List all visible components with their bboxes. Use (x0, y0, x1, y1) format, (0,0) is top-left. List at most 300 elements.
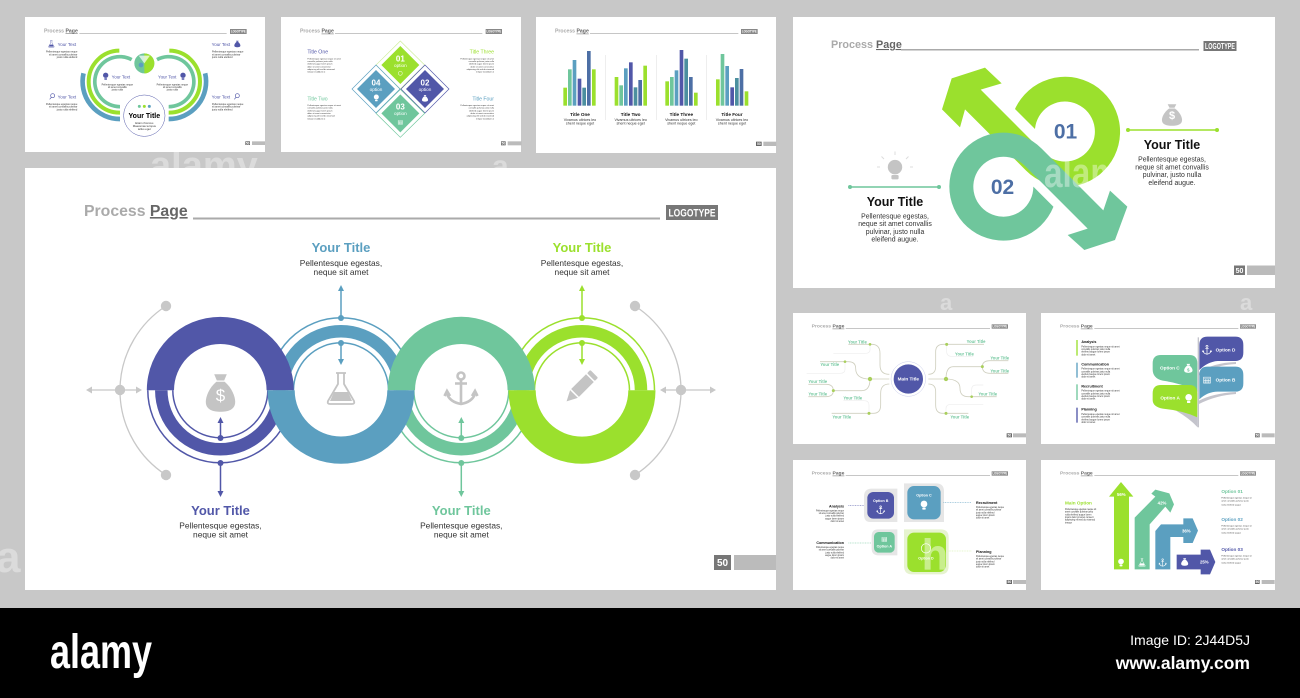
thin arcs: lime (510, 318, 654, 390)
list: analysis (1076, 340, 1120, 356)
text: option 02: amet convallis pulvinar justo (1221, 527, 1249, 530)
text: recruitment: augue lorem ipsum (976, 514, 995, 517)
chart captions (564, 112, 748, 126)
watermark in gaps: a (940, 290, 953, 315)
chart captions: Title Three (670, 112, 693, 117)
main title circle: Main Title (898, 377, 919, 382)
text: title three: Title Three (470, 50, 494, 56)
header: Process Page (831, 39, 902, 51)
text: option 01: Option 01 (1221, 489, 1243, 494)
text: recruitment: Pellentesque egestas neque (976, 506, 1005, 509)
header: LOGOTYPE (231, 30, 246, 34)
header (300, 29, 522, 145)
labels: Your Title (808, 379, 828, 384)
header: 50 (1236, 268, 1243, 275)
connectors: main (808, 344, 1008, 413)
label text: Pellentesque egestas neque (212, 103, 244, 106)
list: analysis: Analysis (1081, 340, 1096, 344)
text: title four: Title Four (472, 96, 494, 102)
chart captions: Vivamus ultrices leo (716, 118, 748, 122)
panel: infinity arrows slide (793, 17, 1275, 288)
panel: bent arrows slide (1041, 460, 1275, 590)
text: planning: Pellentesque egestas neque (976, 555, 1005, 558)
text: analysis: sit amet convallis pulvinar (819, 512, 844, 515)
arrow: 56% (1109, 482, 1133, 569)
diamond 04: 04 (372, 78, 381, 87)
diamond 04: option (370, 87, 383, 92)
labels: Your Title (967, 339, 986, 344)
label text: Pellentesque egestas neque (46, 103, 78, 106)
label text: justo nulla (111, 89, 124, 92)
header (812, 324, 1026, 437)
list: recruitment: dolor sit amet (1081, 398, 1096, 401)
list: recruitment: convallis pulvinar justo nulla (1081, 392, 1111, 395)
text: analysis: Pellentesque egestas neque (816, 509, 845, 512)
callout: right: $ (1169, 110, 1175, 122)
text: title two: convallis pulvinar justo nulla (307, 107, 334, 110)
list: analysis: eleifend augue lorem ipsum (1081, 351, 1110, 354)
panel: main rings slide (25, 168, 776, 590)
labels: Your Text (58, 42, 77, 47)
list: communication: convallis pulvinar justo nulla (1081, 370, 1111, 373)
panel: diamonds slide (281, 17, 522, 152)
leaf: option A (1153, 385, 1197, 417)
text: planning: dolor sit amet (976, 566, 990, 569)
text: title three: Pellentesque egestas neque sit amet (460, 57, 494, 60)
leaf: option C: $ (1187, 367, 1190, 372)
label text: sit amet convallis pulvinar (49, 106, 77, 109)
text: purple title: neque sit amet (193, 530, 249, 540)
option A square: Option A (877, 544, 892, 548)
labels (808, 339, 1010, 419)
text: green title: Your Title (432, 503, 491, 518)
label text: Pellentesque egestas neque (157, 83, 189, 86)
diamond 04 (352, 65, 400, 113)
header: 50 (1255, 580, 1259, 584)
arrows: purple (218, 417, 224, 497)
label text: Pellentesque egestas neque (46, 51, 78, 54)
labels: Your Text (212, 94, 231, 99)
text: title one: adipiscing elit sed do eiusmod (307, 68, 335, 71)
list: analysis: Pellentesque egestas neque sit amet (1081, 345, 1120, 348)
icon: money bag (206, 374, 235, 412)
nodes (832, 343, 984, 415)
text: communication: augue lorem ipsum (825, 554, 844, 557)
text: title one: Pellentesque egestas neque sit amet (307, 57, 341, 60)
text: green title: neque sit amet (434, 530, 489, 540)
text: title four: convallis pulvinar justo nulla (469, 107, 495, 110)
text: title four: dolor sit amet consectetur (471, 112, 494, 115)
label text: sit amet convallis (163, 86, 183, 89)
list: communication: eleifend augue lorem ipsum (1081, 373, 1110, 376)
diamond 03: option (394, 111, 407, 116)
text: main option: ipsum dolor sit amet consect (1065, 516, 1094, 519)
header: LOGOTYPE (1205, 42, 1235, 51)
watermark in gaps (0, 145, 1253, 582)
header (831, 39, 1275, 275)
list: communication (1076, 362, 1120, 379)
chart captions: shent neque eget (667, 122, 695, 126)
header (555, 29, 776, 146)
main title circle (891, 362, 926, 396)
header (84, 203, 718, 220)
header: Process Page (1060, 471, 1093, 477)
text: recruitment: Recruitment (976, 501, 998, 505)
arrow ring 01 (942, 68, 1120, 187)
labels: Your Text (58, 94, 77, 99)
bar chart: title three (665, 50, 698, 106)
list: planning: Planning (1081, 408, 1097, 412)
labels: Your Title (848, 339, 867, 344)
text: option 03: amet convallis pulvinar justo (1221, 557, 1249, 560)
label text (46, 51, 244, 111)
text: recruitment: dolor sit amet (976, 517, 990, 520)
text: option 02: Option 02 (1221, 517, 1243, 522)
text: title four: adipiscing elit sed do eiusmod (467, 115, 494, 118)
leaf: option C: Option C (1160, 366, 1180, 371)
text: planning: justo nulla eleifend (975, 560, 995, 563)
diamond 01: 01 (396, 54, 405, 63)
diamond 02: 02 (421, 78, 430, 87)
text: green title (420, 503, 503, 540)
text: option 03: Option 03 (1221, 547, 1243, 552)
leaf: option D (1199, 337, 1243, 370)
text: main option: amet convallis pulvinar justo (1065, 511, 1094, 514)
panel: rounded squares slide (793, 460, 1026, 590)
text: lime title: Pellentesque egestas, (541, 258, 623, 268)
list: planning: Pellentesque egestas neque sit amet (1081, 413, 1120, 416)
text: recruitment (975, 501, 1005, 520)
watermark in gaps: alamy (150, 145, 258, 187)
text: analysis: justo nulla eleifend (825, 515, 845, 518)
thin arcs: blue (268, 318, 414, 390)
arrows: blue (338, 285, 344, 365)
header: Process Page (1060, 324, 1093, 330)
center circle: your title: tellus eget (138, 127, 151, 131)
label text: justo nulla eleifend (211, 56, 233, 59)
option D square: Option D (918, 556, 934, 560)
text: title one: Title One (307, 50, 328, 56)
right gray arc (630, 301, 716, 480)
text: title two: Pellentesque egestas neque sit amet (307, 104, 341, 107)
header: LOGOTYPE (992, 325, 1008, 329)
list: analysis: convallis pulvinar justo nulla (1081, 348, 1111, 351)
text: lime title: Your Title (553, 240, 611, 255)
text: planning: augue lorem ipsum (976, 563, 995, 566)
text: recruitment: sit amet convallis pulvinar (976, 509, 1002, 512)
list: planning (1076, 408, 1120, 424)
header (1060, 324, 1275, 437)
text: title three: convallis pulvinar justo nulla (469, 60, 495, 63)
arrows: green (458, 417, 464, 497)
list: recruitment (1076, 384, 1120, 401)
chart captions: Title One (570, 112, 590, 117)
option D square: h (922, 531, 948, 579)
small icons (48, 41, 240, 99)
number 01: 01 (1054, 120, 1077, 144)
header (44, 28, 265, 145)
panel: bar charts slide (536, 17, 776, 153)
number 02: 02 (991, 176, 1014, 199)
callout: right: pulvinar, justo nulla (1143, 172, 1201, 179)
header: LOGOTYPE (1241, 472, 1256, 476)
header: LOGOTYPE (742, 30, 757, 34)
option B square (864, 489, 897, 522)
header: 50 (246, 141, 250, 145)
page number: 50 (717, 558, 728, 569)
labels: Your Text (112, 75, 131, 80)
dividers (605, 55, 707, 120)
text: analysis: augue lorem ipsum (825, 517, 844, 520)
labels: Your Title (950, 414, 970, 419)
header: Process Page (555, 29, 589, 35)
list: communication: Pellentesque egestas neque sit amet (1081, 368, 1120, 371)
text: purple title: Your Title (191, 503, 250, 518)
list: recruitment: Recruitment (1081, 384, 1103, 388)
header: 50 (757, 142, 761, 146)
header: 50 (501, 141, 505, 145)
diamond 02: option (419, 87, 432, 92)
chart captions: Vivamus ultrices leo (564, 118, 596, 122)
labels: Your Title (955, 352, 974, 357)
icon: flask (328, 373, 354, 404)
header (812, 471, 1026, 584)
option C square (904, 483, 944, 522)
header (1060, 471, 1275, 584)
label text: sit amet convallis pulvinar (49, 53, 77, 56)
callout: left: Your Title (867, 195, 923, 209)
arrow: 56%: 56% (1117, 492, 1126, 497)
text: option 01: Pellentesque egestas neque sit (1221, 496, 1252, 499)
list: planning: eleifend augue lorem ipsum (1081, 418, 1110, 421)
arrow: 25%: 25% (1200, 559, 1209, 564)
panel: circular arcs slide (25, 17, 265, 152)
icon: pencil (563, 370, 598, 405)
thin arcs: green (389, 390, 534, 463)
text: analysis (816, 504, 845, 523)
text: communication: sit amet convallis pulvinar (819, 549, 844, 552)
text: title three (460, 50, 495, 74)
center circle: your title (124, 95, 165, 136)
thin arcs: purple (148, 390, 293, 463)
list: communication: Communication (1081, 362, 1109, 366)
text: planning: Planning (976, 550, 991, 554)
arrow: 36%: 36% (1182, 529, 1191, 534)
list: planning: convallis pulvinar justo nulla (1081, 416, 1111, 419)
text: title four: Pellentesque egestas neque sit amet (460, 104, 494, 107)
header: Process Page (84, 203, 188, 220)
callout: left (848, 152, 941, 244)
text: title four: eleifend augue lorem ipsum (469, 109, 494, 112)
ring 3 solid half (388, 317, 535, 390)
labels: Your Title (808, 392, 828, 397)
labels: Your Title (843, 395, 863, 400)
labels: Your Title (832, 414, 852, 419)
leaf: option D: Option D (1216, 348, 1236, 353)
page number (714, 555, 776, 570)
callout: right: neque sit amet convallis (1135, 164, 1209, 171)
leaf: option B (1199, 367, 1243, 399)
header: 50 (1255, 433, 1259, 437)
header: Process Page (44, 28, 78, 34)
list: recruitment: Pellentesque egestas neque sit amet (1081, 390, 1120, 393)
header: LOGOTYPE (1241, 325, 1256, 329)
text: option 01: nulla eleifend augue (1221, 504, 1242, 506)
text: green title: Pellentesque egestas, (420, 520, 503, 530)
text: recruitment: justo nulla eleifend (975, 511, 995, 514)
chart captions: shent neque eget (566, 122, 594, 126)
watermark in gaps: a (1240, 290, 1253, 315)
text: main option: Pellentesque egestas neque sit (1065, 508, 1097, 511)
connectors: faint (807, 344, 983, 413)
labels: Your Title (978, 391, 998, 396)
option A square (872, 529, 897, 555)
header: Process Page (812, 324, 845, 330)
callout: left: pulvinar, justo nulla (866, 229, 924, 236)
text: title four (460, 96, 495, 120)
diamond 03: 03 (396, 103, 405, 112)
text: lime title (541, 240, 623, 277)
text: title two: adipiscing elit sed do eiusmod (307, 115, 335, 118)
chart captions: Title Four (721, 112, 743, 117)
text: analysis: Analysis (829, 504, 844, 508)
bar chart: title two (615, 62, 647, 106)
panel: leaves slide (1041, 313, 1275, 444)
top circle (134, 53, 154, 73)
text: blue title: Your Title (312, 240, 370, 255)
text: title three: tempor incididunt ut (476, 71, 494, 74)
text: option 01 (1221, 489, 1252, 506)
label text: justo nulla eleifend (56, 108, 78, 111)
chart captions: shent neque eget (617, 122, 645, 126)
labels: Your Title (990, 368, 1010, 373)
text: title two: Title Two (307, 96, 328, 102)
label text: sit amet convallis pulvinar (212, 53, 240, 56)
option C square: Option C (916, 494, 932, 498)
dashed leader lines (848, 502, 972, 551)
center circle: your title: Maecenas tempus (133, 124, 156, 128)
option B square: Option B (873, 499, 889, 503)
text: communication: Pellentesque egestas neque (816, 546, 845, 549)
list: planning: dolor sit amet (1081, 421, 1096, 424)
text: title one: convallis pulvinar justo nulla (307, 60, 334, 63)
labels: Your Title (820, 362, 840, 367)
text: main option: tempor (1065, 521, 1072, 524)
option D square (904, 529, 949, 579)
text: title two: tempor incididunt ut (307, 117, 326, 120)
label text: Pellentesque egestas neque (212, 51, 244, 54)
text: communication (816, 541, 845, 560)
callout: left: Pellentesque egestas, (861, 213, 929, 220)
text: blue title: neque sit amet (314, 267, 369, 277)
text: option 03: nulla eleifend augue (1221, 562, 1242, 564)
text: communication: Communication (816, 541, 844, 545)
arrow: 42%: 42% (1158, 501, 1166, 506)
header: LOGOTYPE (486, 30, 502, 34)
header: LOGOTYPE (668, 208, 716, 220)
leaf: option C (1153, 355, 1197, 392)
text: title three: adipiscing elit sed do eiusmod (467, 68, 494, 71)
text: planning (975, 550, 1005, 569)
labels: Your Title (990, 356, 1010, 361)
text: title two: eleifend augue lorem ipsum (307, 109, 333, 112)
concentric arcs (83, 51, 206, 119)
list: recruitment: eleifend augue lorem ipsum (1081, 395, 1110, 398)
list: analysis: dolor sit amet (1081, 353, 1096, 356)
label text: Pellentesque egestas neque (102, 83, 134, 86)
text: title three: dolor sit amet consectetur (471, 65, 494, 68)
diamond 02 (401, 65, 449, 113)
callout: left: eleifend augue. (871, 237, 919, 244)
icon: money bag: $ (216, 386, 226, 405)
labels: Your Text (158, 75, 177, 80)
center circle: your title: Your Title (129, 113, 160, 120)
arrow: 25% (1177, 550, 1215, 574)
bar chart: title one (563, 51, 596, 106)
panel: mind map slide (793, 313, 1026, 444)
text: title four: tempor incididunt ut (476, 117, 494, 120)
labels: Your Text (212, 42, 231, 47)
callout: right (1126, 104, 1219, 187)
icon: anchor (444, 372, 478, 404)
text: communication: dolor sit amet (831, 557, 844, 560)
text: main option: nulla eleifend augue lorem (1065, 513, 1092, 516)
header: Process Page (812, 471, 845, 477)
text: blue title: Pellentesque egestas, (300, 258, 382, 268)
text: title three: eleifend augue lorem ipsum (469, 63, 494, 66)
diamond 01: option (394, 63, 407, 68)
center circle: your title: Etiam rhoncus (135, 121, 154, 125)
leaf: option B: Option B (1216, 377, 1236, 382)
text: title one: dolor sit amet consectetur (307, 65, 331, 68)
left gray arc (86, 301, 171, 480)
text: planning: sit amet convallis pulvinar (976, 558, 1002, 561)
text: option 03: Pellentesque egestas neque sit (1221, 554, 1252, 557)
diamond 03 (376, 89, 425, 137)
text: option 02 (1221, 517, 1252, 534)
text: title one (307, 50, 341, 74)
label text: justo nulla (166, 89, 179, 92)
arrows: lime (579, 285, 585, 365)
text: main option: Main Option (1065, 501, 1092, 506)
text: main option (1065, 501, 1097, 524)
footer band (0, 608, 1300, 698)
leaf: option A: Option A (1160, 395, 1180, 400)
text: title one: tempor incididunt ut (307, 71, 326, 74)
text: communication: justo nulla eleifend (825, 551, 845, 554)
text: title two: dolor sit amet consectetur (307, 112, 331, 115)
image id: Image ID: 2J44D5J (1130, 632, 1250, 648)
text: option 02: nulla eleifend augue (1221, 532, 1242, 534)
labels (58, 42, 231, 99)
header: Process Page (300, 29, 334, 35)
ring 4 solid half (508, 390, 656, 464)
text: title one: eleifend augue lorem ipsum (307, 63, 333, 66)
text: option 01: amet convallis pulvinar justo (1221, 499, 1249, 502)
bar chart: title four (716, 54, 748, 106)
ring 1 solid half (147, 317, 294, 390)
website: www.alamy.com (1115, 653, 1250, 673)
stem and shadows (1176, 337, 1236, 427)
text: main option: adipiscing elit sed do eiusmod (1065, 519, 1096, 522)
callout: right: eleifend augue. (1148, 180, 1196, 187)
arrow ring 02 (949, 133, 1127, 250)
text: analysis: dolor sit amet (831, 520, 844, 523)
callout: right: Your Title (1144, 138, 1200, 152)
arrow: 36% (1155, 518, 1198, 569)
diamond 01 (376, 41, 425, 89)
header: LOGOTYPE (992, 472, 1008, 476)
